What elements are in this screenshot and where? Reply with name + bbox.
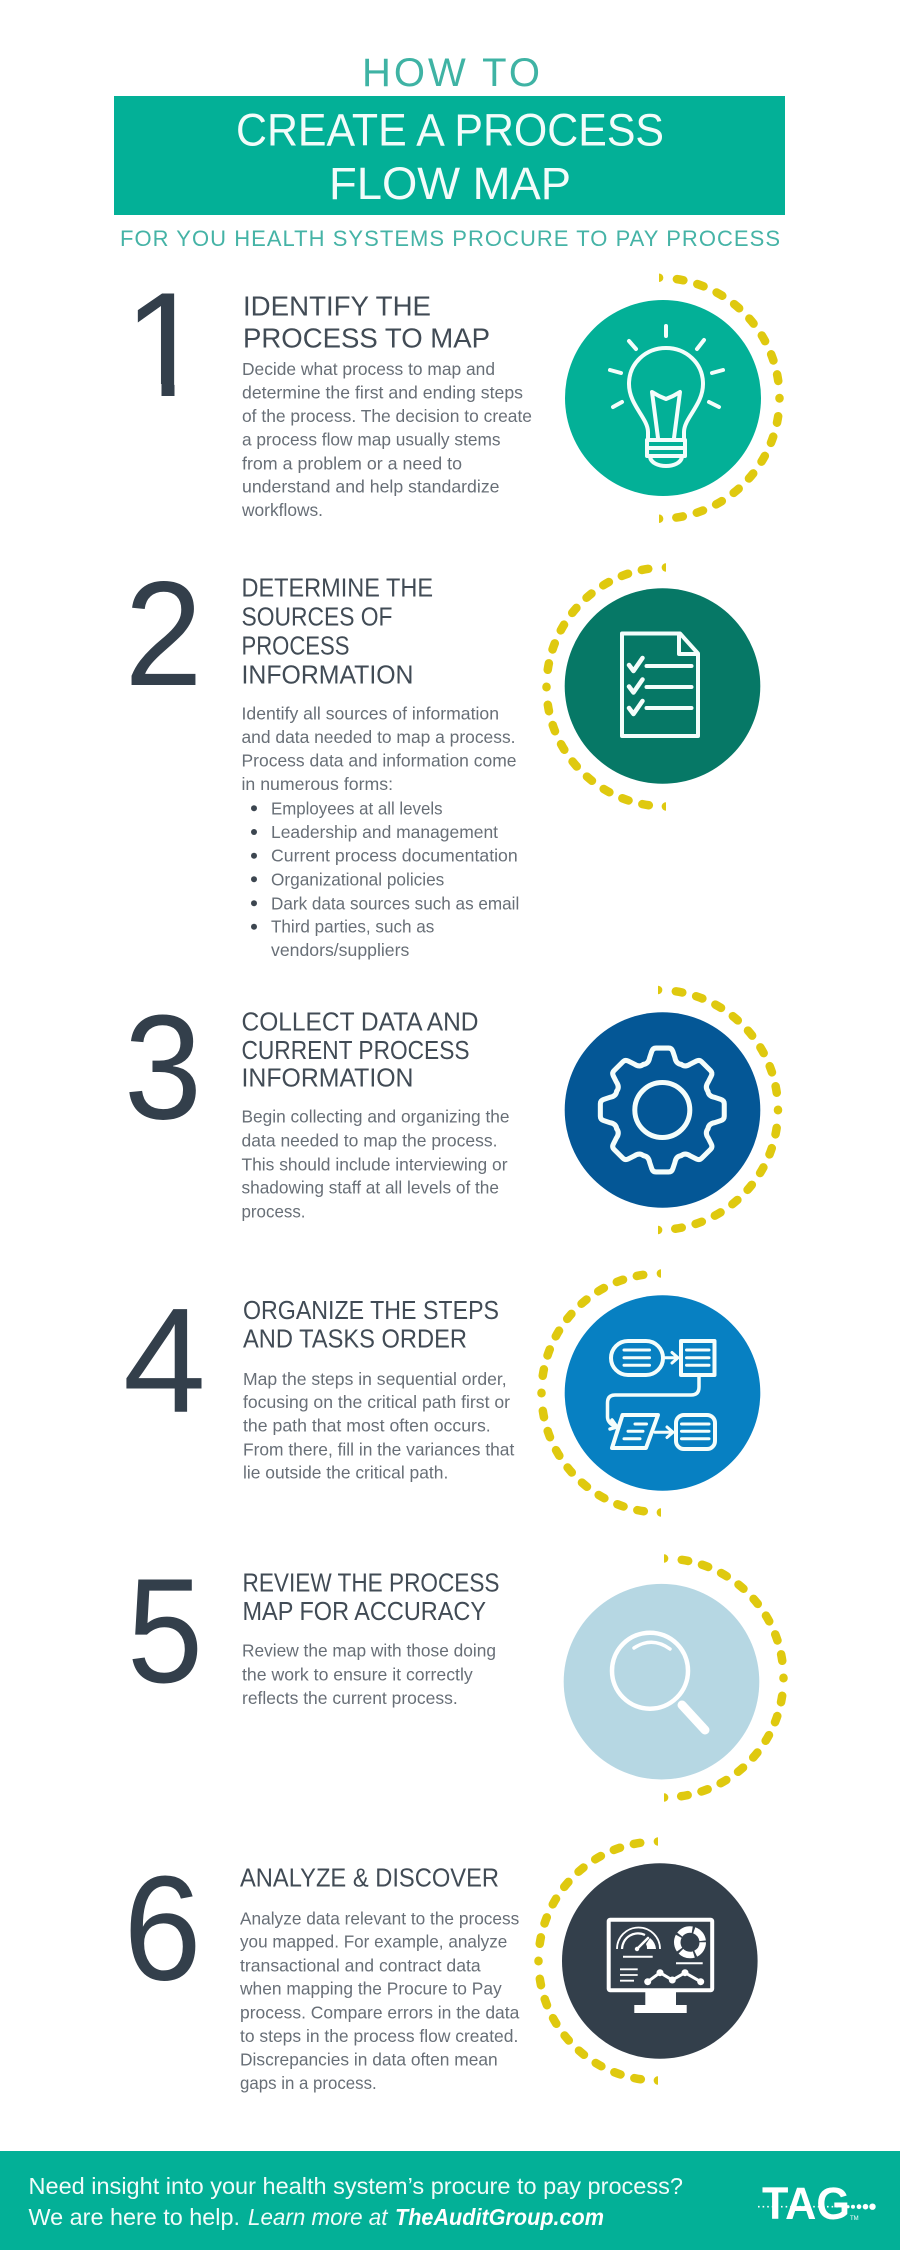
number 1: 1 bbox=[124, 261, 206, 428]
heading: step 6: ANALYZE & DISCOVER bbox=[240, 1863, 499, 1893]
subtitle: FOR YOU HEALTH SYSTEMS PROCURE TO PAY PROCESS bbox=[120, 226, 780, 251]
icon: checklist document in circle bbox=[546, 568, 760, 806]
body: step 3: Begin collecting and organizing the bbox=[242, 1107, 510, 1127]
body: step 6: transactional and contract data bbox=[240, 1955, 481, 1975]
title block bbox=[114, 51, 785, 251]
heading: step 5: REVIEW THE PROCESS bbox=[242, 1568, 500, 1598]
heading: step 2: PROCESS bbox=[242, 630, 350, 660]
footer text bbox=[28, 2173, 683, 2230]
body: step 6: Discrepancies in data often mean bbox=[240, 2050, 498, 2070]
icon: gear in circle bbox=[565, 990, 778, 1230]
footer text: Learn more at bbox=[248, 2204, 389, 2230]
body: step 3: This should include interviewing or bbox=[242, 1154, 508, 1174]
bullet list: information sources: Organizational policies bbox=[271, 869, 445, 889]
icon: magnifying glass in circle bbox=[564, 1558, 784, 1798]
panel: step 5 bbox=[127, 1547, 784, 1798]
footer text: We are here to help. bbox=[28, 2204, 240, 2230]
icon: flow chart in circle bbox=[542, 1274, 760, 1512]
logo: TAG: TAG bbox=[762, 2178, 850, 2229]
body: step 6 bbox=[239, 1908, 520, 2093]
body: step 3 bbox=[242, 1107, 510, 1221]
bullet list: information sources: Third parties, such as bbox=[271, 916, 435, 936]
body: step 6: when mapping the Procure to Pay bbox=[239, 1979, 502, 1999]
number 5: 5 bbox=[127, 1547, 203, 1714]
bullet list: information sources bbox=[251, 798, 519, 960]
heading: step 3: INFORMATION bbox=[242, 1063, 414, 1093]
footer text: Need insight into your health system’s procure to pay process? bbox=[28, 2173, 683, 2199]
body: step 6: you mapped. For example, analyze bbox=[240, 1932, 507, 1952]
panel: step 6 bbox=[124, 1842, 758, 2093]
eyebrow: how to: HOW TO bbox=[362, 51, 540, 95]
body: step 6: gaps in a process. bbox=[240, 2073, 377, 2093]
bullet list: information sources: Dark data sources such as email bbox=[271, 893, 519, 913]
body: step 2 bbox=[242, 704, 516, 794]
heading: step 5: MAP FOR ACCURACY bbox=[242, 1596, 486, 1626]
heading: step 3 bbox=[242, 1007, 478, 1093]
body: step 5: reflects the current process. bbox=[242, 1688, 458, 1708]
number 3: 3 bbox=[124, 984, 202, 1150]
panel: step 4 bbox=[123, 1274, 760, 1512]
heading: step 1: PROCESS TO MAP bbox=[243, 322, 490, 354]
body: step 1: of the process. The decision to create bbox=[242, 406, 532, 426]
body: step 2: and data needed to map a process. bbox=[242, 727, 516, 747]
heading: step 3: CURRENT PROCESS bbox=[242, 1035, 470, 1065]
body: step 1: a process flow map usually stems bbox=[242, 430, 501, 450]
icon: dashboard monitor in circle bbox=[538, 1842, 758, 2080]
body: step 1: understand and help standardize bbox=[242, 476, 500, 496]
icon: light bulb in circle bbox=[565, 278, 780, 519]
body: step 5: the work to ensure it correctly bbox=[242, 1664, 473, 1684]
title banner: CREATE A PROCESS bbox=[236, 104, 664, 156]
heading: step 4: AND TASKS ORDER bbox=[243, 1324, 467, 1354]
body: step 1: Decide what process to map and bbox=[242, 359, 495, 379]
title banner bbox=[114, 96, 785, 215]
heading: step 2: DETERMINE THE bbox=[242, 572, 433, 602]
number 2: 2 bbox=[124, 550, 202, 717]
heading: step 5 bbox=[242, 1568, 500, 1626]
number 6: 6 bbox=[124, 1844, 202, 2012]
panel: step 3 bbox=[124, 984, 778, 1230]
body: step 1: determine the first and ending steps bbox=[242, 382, 523, 402]
body: step 1: from a problem or a need to bbox=[242, 454, 462, 474]
bullet list: information sources: Current process documentation bbox=[271, 846, 518, 866]
number 4: 4 bbox=[123, 1277, 206, 1444]
body: step 6: to steps in the process flow created. bbox=[240, 2026, 518, 2046]
bullet list: information sources: Leadership and management bbox=[271, 822, 498, 842]
heading: step 1 bbox=[243, 290, 490, 354]
body: step 1: workflows. bbox=[241, 500, 323, 520]
body: step 2: Process data and information come bbox=[242, 750, 516, 770]
bullet list: information sources: vendors/suppliers bbox=[271, 940, 410, 960]
body: step 3: process. bbox=[242, 1201, 306, 1221]
heading: step 2: SOURCES OF bbox=[242, 602, 392, 632]
body: step 5: Review the map with those doing bbox=[242, 1641, 496, 1661]
body: step 1 bbox=[241, 359, 532, 520]
panel: step 2 bbox=[124, 550, 760, 960]
body: step 4: From there, fill in the variances that bbox=[243, 1439, 514, 1459]
panel: step 1 bbox=[124, 261, 780, 520]
body: step 3: data needed to map the process. bbox=[242, 1130, 498, 1150]
heading: step 1: IDENTIFY THE bbox=[243, 290, 431, 322]
heading: step 2: INFORMATION bbox=[242, 660, 414, 690]
body: step 6: process. Compare errors in the data bbox=[240, 2002, 520, 2022]
heading: step 3: COLLECT DATA AND bbox=[242, 1007, 478, 1037]
footer text: TheAuditGroup.com bbox=[395, 2204, 604, 2230]
footer call to action bbox=[0, 2151, 900, 2250]
body: step 3: shadowing staff at all levels of the bbox=[242, 1178, 499, 1198]
body: step 5 bbox=[242, 1641, 496, 1708]
body: step 4: focusing on the critical path first or bbox=[243, 1392, 510, 1412]
body: step 2: in numerous forms: bbox=[242, 774, 393, 794]
body: step 4 bbox=[243, 1369, 514, 1483]
heading: step 2 bbox=[242, 572, 433, 690]
body: step 4: Map the steps in sequential order, bbox=[243, 1369, 507, 1389]
bullet list: information sources: Employees at all levels bbox=[271, 798, 443, 818]
title banner: FLOW MAP bbox=[329, 158, 571, 209]
body: step 2: Identify all sources of information bbox=[242, 704, 499, 724]
heading: step 4: ORGANIZE THE STEPS bbox=[243, 1295, 499, 1325]
body: step 6: Analyze data relevant to the process bbox=[240, 1908, 520, 1928]
heading: step 4 bbox=[243, 1295, 499, 1354]
body: step 4: lie outside the critical path. bbox=[243, 1463, 448, 1483]
body: step 4: the path that most often occurs. bbox=[243, 1416, 491, 1436]
logo: TAG: TM bbox=[850, 2216, 859, 2222]
